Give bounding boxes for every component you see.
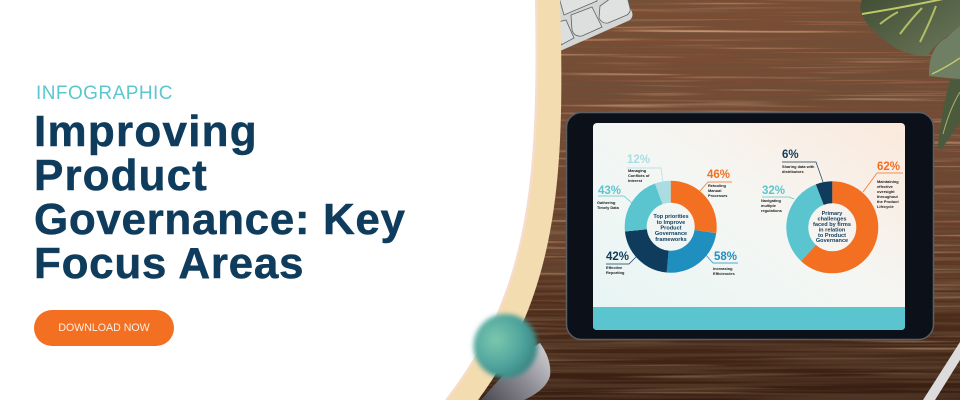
teal ball bbox=[474, 314, 538, 378]
callout 46%: 46% bbox=[707, 169, 730, 181]
donut center label: Governance bbox=[816, 238, 848, 244]
donut center label: challenges bbox=[818, 216, 846, 222]
main title: Governance: Key bbox=[34, 195, 406, 244]
callout 43%: Gathering bbox=[597, 200, 616, 205]
main title bbox=[34, 107, 406, 288]
white panel with beige curved edge bbox=[0, 0, 561, 400]
donut center label: faced by firms bbox=[813, 222, 851, 228]
callout 32% bbox=[761, 185, 794, 213]
callout 6%: 6% bbox=[782, 149, 799, 161]
main title: Product bbox=[34, 151, 208, 200]
callout 62%: Maintaining bbox=[877, 179, 899, 184]
callout 62% bbox=[863, 161, 903, 209]
callout 58% bbox=[705, 251, 738, 276]
callout 62%: throughout bbox=[877, 194, 898, 199]
donut center label: Product bbox=[660, 226, 682, 232]
callout 46%: Retooling bbox=[708, 183, 727, 188]
callout 43% bbox=[597, 185, 632, 210]
download button: DOWNLOAD NOW bbox=[58, 322, 150, 334]
callout 62%: the Product bbox=[877, 199, 899, 204]
callout 32%: regulations bbox=[761, 208, 782, 213]
eyebrow label: INFOGRAPHIC bbox=[36, 83, 173, 104]
tablet bbox=[566, 112, 934, 340]
donut center label: to Improve bbox=[657, 220, 685, 226]
callout 58%: Efficiencies bbox=[713, 271, 735, 276]
callout 58%: Increasing bbox=[713, 266, 733, 271]
tablet screen bbox=[593, 123, 905, 330]
callout 12% bbox=[627, 154, 663, 183]
callout 46%: Manual bbox=[708, 188, 721, 193]
donut center label: in relation bbox=[819, 228, 846, 234]
wood desk bbox=[480, 0, 960, 400]
callout 42% bbox=[606, 251, 637, 275]
donut center label: to Product bbox=[818, 233, 846, 239]
mouse bbox=[481, 343, 550, 400]
callout 42%: Reporting bbox=[606, 270, 625, 275]
download button bbox=[34, 310, 174, 346]
donut center label: Top priorities bbox=[653, 214, 689, 220]
plant leaves bbox=[860, 0, 960, 150]
callout 62%: effective bbox=[877, 184, 894, 189]
donut chart: primary challenges bbox=[761, 149, 903, 277]
callout 43%: Timely Data bbox=[597, 205, 620, 210]
stylus bbox=[923, 342, 960, 400]
callout 62%: Lifecycle bbox=[877, 204, 894, 209]
callout 6% bbox=[782, 149, 823, 182]
main title: Improving bbox=[34, 107, 258, 156]
callout 32%: 32% bbox=[762, 185, 785, 197]
callout 12%: Managing bbox=[628, 168, 647, 173]
donut center label: Governance bbox=[655, 231, 687, 237]
callout 32%: Navigating bbox=[761, 198, 782, 203]
callout 43%: 43% bbox=[598, 185, 621, 197]
callout 12%: Conflicts of bbox=[628, 173, 650, 178]
teal footer bar bbox=[593, 307, 905, 330]
donut center label: frameworks bbox=[655, 237, 687, 243]
callout 46%: Processes bbox=[708, 193, 727, 198]
callout 46% bbox=[700, 169, 732, 198]
callout 6%: Sharing data with bbox=[782, 164, 815, 169]
donut center label: Primary bbox=[822, 211, 843, 217]
callout 6%: distributors bbox=[782, 169, 804, 174]
callout 58%: 58% bbox=[714, 251, 737, 263]
callout 62%: oversight bbox=[877, 189, 895, 194]
callout 12%: 12% bbox=[627, 154, 650, 166]
callout 32%: multiple bbox=[761, 203, 777, 208]
callout 12%: Interest bbox=[628, 178, 643, 183]
donut chart: top priorities bbox=[597, 154, 738, 276]
main title: Focus Areas bbox=[34, 239, 304, 288]
callout 42%: Effective bbox=[606, 265, 623, 270]
callout 62%: 62% bbox=[877, 161, 900, 173]
keyboard bbox=[540, 0, 632, 51]
callout 42%: 42% bbox=[606, 251, 629, 263]
